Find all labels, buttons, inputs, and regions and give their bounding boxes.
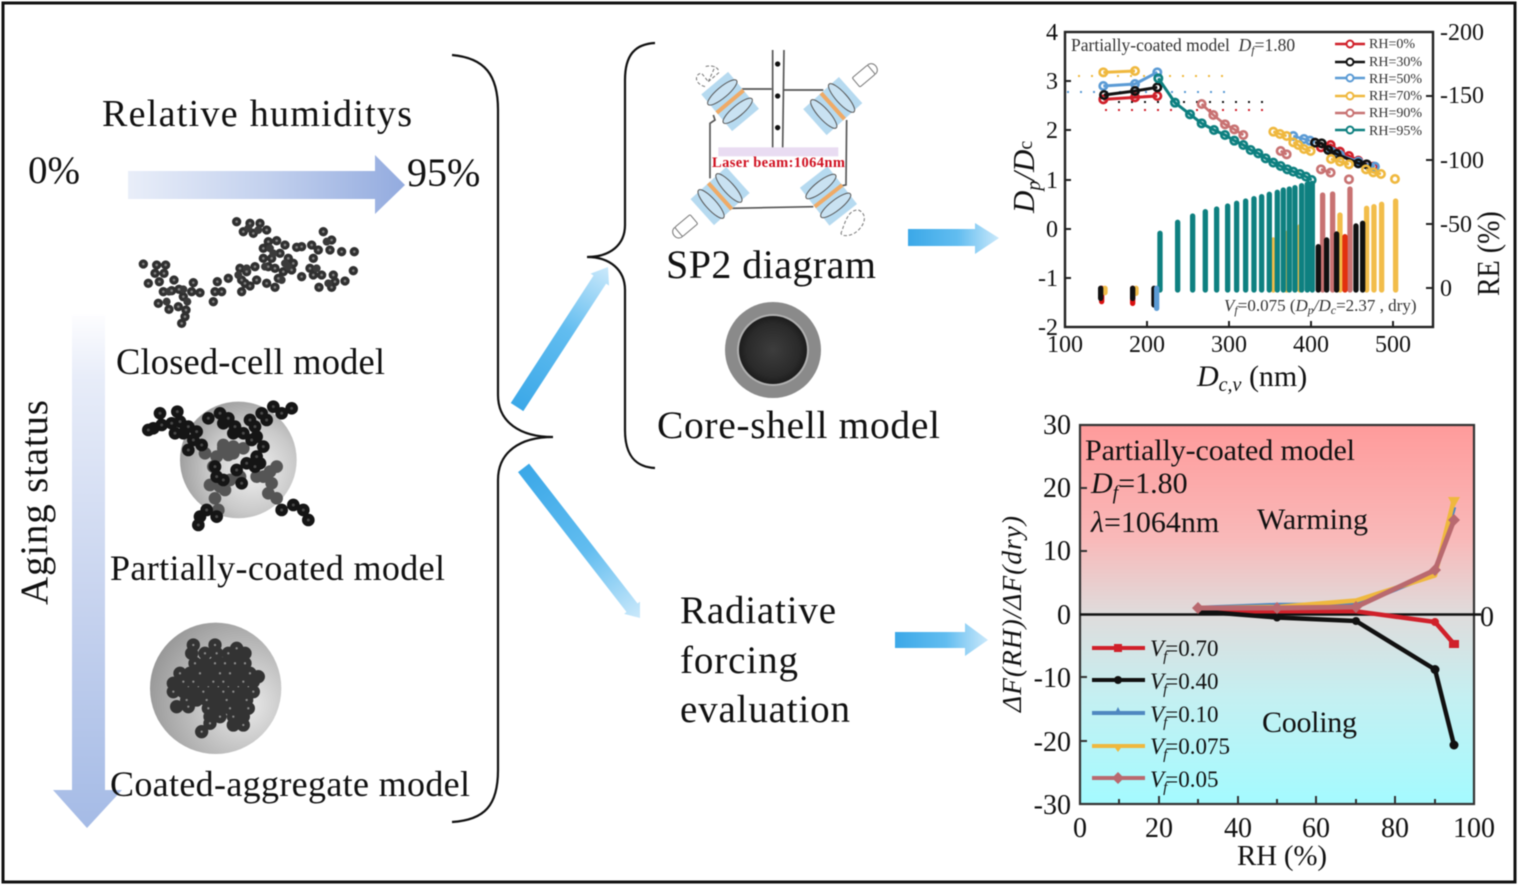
bottom axis labels <box>1047 332 1411 358</box>
label: closed-cell model: Closed-cell model <box>116 341 385 382</box>
bottom axis labels: 500 <box>1375 332 1411 358</box>
label: partially-coated model: Partially-coated model <box>110 548 445 588</box>
chart: closure against core diameter <box>1006 20 1506 396</box>
axis ticks <box>1080 488 1435 804</box>
text: radiative forcing evaluation: evaluation <box>680 688 850 731</box>
legend: relative humidity: RH=95% <box>1369 124 1422 139</box>
label: coated-aggregate model: Coated-aggregate model <box>110 764 470 804</box>
left axis labels: 20 <box>1043 473 1071 504</box>
legend: volume fractions: =0.05 <box>1165 767 1218 792</box>
brace: left grouping <box>452 55 553 822</box>
bottom axis labels <box>1073 813 1495 844</box>
annotation: fractal dimension: f <box>1113 482 1121 504</box>
chart frame and ticks <box>1065 32 1433 327</box>
y axis title: c <box>1015 141 1037 150</box>
brace: SP2 and core-shell <box>587 43 655 468</box>
bottom axis labels: 200 <box>1129 332 1165 358</box>
left axis labels: -30 <box>1034 790 1071 821</box>
legend: volume fractions: f <box>1163 715 1169 731</box>
label: laser beam: Laser beam:1064nm <box>712 155 845 171</box>
bottom axis labels: 400 <box>1293 332 1329 358</box>
legend: relative humidity: RH=50% <box>1369 72 1422 87</box>
label: aging status: Aging status <box>13 400 56 605</box>
bottom axis labels: 60 <box>1302 813 1330 844</box>
arrow: humidity increase <box>128 155 405 214</box>
legend: volume fractions: f <box>1163 682 1169 698</box>
reference lines: dry core-shell dots <box>1067 76 1268 110</box>
right axis labels <box>1440 20 1484 302</box>
arrow: to SP2 diagram <box>508 261 617 413</box>
chart: radiative forcing vs relative humidity <box>996 410 1495 872</box>
label: 0 percent: 0% <box>28 149 80 192</box>
series: forcing ratio lines <box>1192 497 1460 750</box>
text: radiative forcing evaluation: forcing <box>680 639 798 682</box>
left axis labels: -1 <box>1038 266 1058 292</box>
heading: relative humidity: Relative humiditys <box>102 93 412 135</box>
series: closure ratio markers <box>1100 67 1399 184</box>
left axis labels: 10 <box>1043 536 1071 567</box>
annotation: warming: Warming <box>1257 503 1368 536</box>
bottom axis labels: 0 <box>1073 813 1087 844</box>
y axis title: ΔF(RH)/ΔF(dry) <box>996 516 1027 713</box>
annotation: cooling: Cooling <box>1262 706 1357 739</box>
right axis title: RE (%) <box>1470 211 1506 296</box>
chart annotation: volume fraction: V <box>1224 296 1237 315</box>
bars: reduction in scattering <box>1101 183 1396 308</box>
bottom axis labels: 20 <box>1145 813 1173 844</box>
y axis title: D <box>1006 191 1041 214</box>
right axis labels: -200 <box>1440 20 1484 46</box>
label: core-shell model: Core-shell model <box>657 403 940 447</box>
icon: closed-cell aggregate <box>143 222 354 323</box>
left axis labels: 4 <box>1046 20 1058 46</box>
chart annotation: model: f <box>1251 43 1256 57</box>
legend: volume fractions: =0.40 <box>1165 669 1218 694</box>
bottom axis labels: 80 <box>1381 813 1409 844</box>
legend: volume fractions: =0.70 <box>1165 636 1218 661</box>
right axis labels: -150 <box>1440 83 1484 109</box>
icon: partially-coated aggregate <box>148 402 308 525</box>
left axis labels <box>1038 20 1058 341</box>
chart annotation: volume fraction: =2.37 , dry) <box>1336 296 1417 315</box>
left axis labels: 30 <box>1043 410 1071 441</box>
annotation: fractal dimension: =1.80 <box>1118 467 1188 500</box>
chart annotation: model: =1.80 <box>1255 35 1295 55</box>
left axis labels <box>1034 410 1071 821</box>
bottom axis labels: 100 <box>1047 332 1083 358</box>
annotation: wavelength: λ=1064nm <box>1090 506 1219 539</box>
left axis labels: 0 <box>1046 217 1058 243</box>
x axis title: (nm) <box>1241 360 1307 393</box>
diagram: SP2 instrument <box>670 50 880 240</box>
left axis labels: 3 <box>1046 69 1058 95</box>
arrow: to radiative forcing <box>516 462 648 624</box>
icon: core-shell particle <box>725 302 821 398</box>
legend: relative humidity: RH=30% <box>1369 55 1422 70</box>
text: radiative forcing evaluation: Radiative <box>680 589 836 632</box>
legend: volume fractions <box>1092 636 1230 796</box>
left axis labels: 2 <box>1046 118 1058 144</box>
bottom axis labels: 40 <box>1224 813 1252 844</box>
label: SP2 diagram: SP2 diagram <box>666 242 876 287</box>
chart annotation: volume fraction: f <box>1234 303 1239 317</box>
chart annotation: volume fraction: /D <box>1313 296 1331 315</box>
annotation: fractal dimension: D <box>1090 467 1113 500</box>
text: radiative forcing evaluation <box>680 589 850 731</box>
right axis labels: -50 <box>1440 212 1472 238</box>
y axis title: /D <box>1006 150 1041 183</box>
label: 95 percent: 95% <box>407 150 480 195</box>
arrow: aging status <box>53 315 122 828</box>
x axis title: RH (%) <box>1237 840 1327 872</box>
right axis labels: 0 <box>1440 276 1452 302</box>
legend: volume fractions: f <box>1163 649 1169 665</box>
left axis labels: 0 <box>1057 600 1071 631</box>
legend: volume fractions: V <box>1150 767 1167 792</box>
left axis labels: -20 <box>1034 727 1071 758</box>
icon: coated aggregate <box>150 623 281 754</box>
y axis title: p <box>1023 181 1045 193</box>
chart annotation: model: Partially-coated model D <box>1071 35 1251 55</box>
chart annotation: volume fraction: D <box>1294 296 1308 315</box>
chart annotation: volume fraction: c <box>1331 303 1337 317</box>
legend: volume fractions: V <box>1150 669 1167 694</box>
chart annotation: volume fraction: =0.075 ( <box>1238 296 1296 315</box>
left axis labels: 1 <box>1046 168 1058 194</box>
left axis labels: -2 <box>1038 315 1058 341</box>
x axis title: c,v <box>1219 374 1242 396</box>
bottom axis labels: 100 <box>1453 813 1495 844</box>
zero line <box>1080 613 1481 616</box>
annotation: model: Partially-coated model <box>1085 434 1355 467</box>
x axis title: D <box>1196 360 1219 393</box>
arrow: forcing to chart <box>895 623 988 656</box>
legend: relative humidity <box>1335 37 1422 139</box>
legend: volume fractions: f <box>1163 780 1169 796</box>
legend: volume fractions: =0.075 <box>1165 734 1230 759</box>
right zero label: 0 <box>1480 602 1494 633</box>
legend: volume fractions: V <box>1150 702 1167 727</box>
legend: volume fractions: f <box>1163 747 1169 763</box>
plot background: warming to cooling gradient <box>1080 425 1474 804</box>
legend: relative humidity: RH=90% <box>1369 106 1422 121</box>
legend: volume fractions: =0.10 <box>1165 702 1218 727</box>
legend: volume fractions: V <box>1150 734 1167 759</box>
arrow: SP2 to closure chart <box>908 223 999 254</box>
legend: relative humidity: RH=0% <box>1369 37 1415 52</box>
legend: volume fractions: V <box>1150 636 1167 661</box>
left axis labels: -10 <box>1034 663 1071 694</box>
legend: relative humidity: RH=70% <box>1369 89 1422 104</box>
right axis labels: -100 <box>1440 148 1484 174</box>
chart annotation: volume fraction: p <box>1307 303 1314 317</box>
bottom axis labels: 300 <box>1211 332 1247 358</box>
